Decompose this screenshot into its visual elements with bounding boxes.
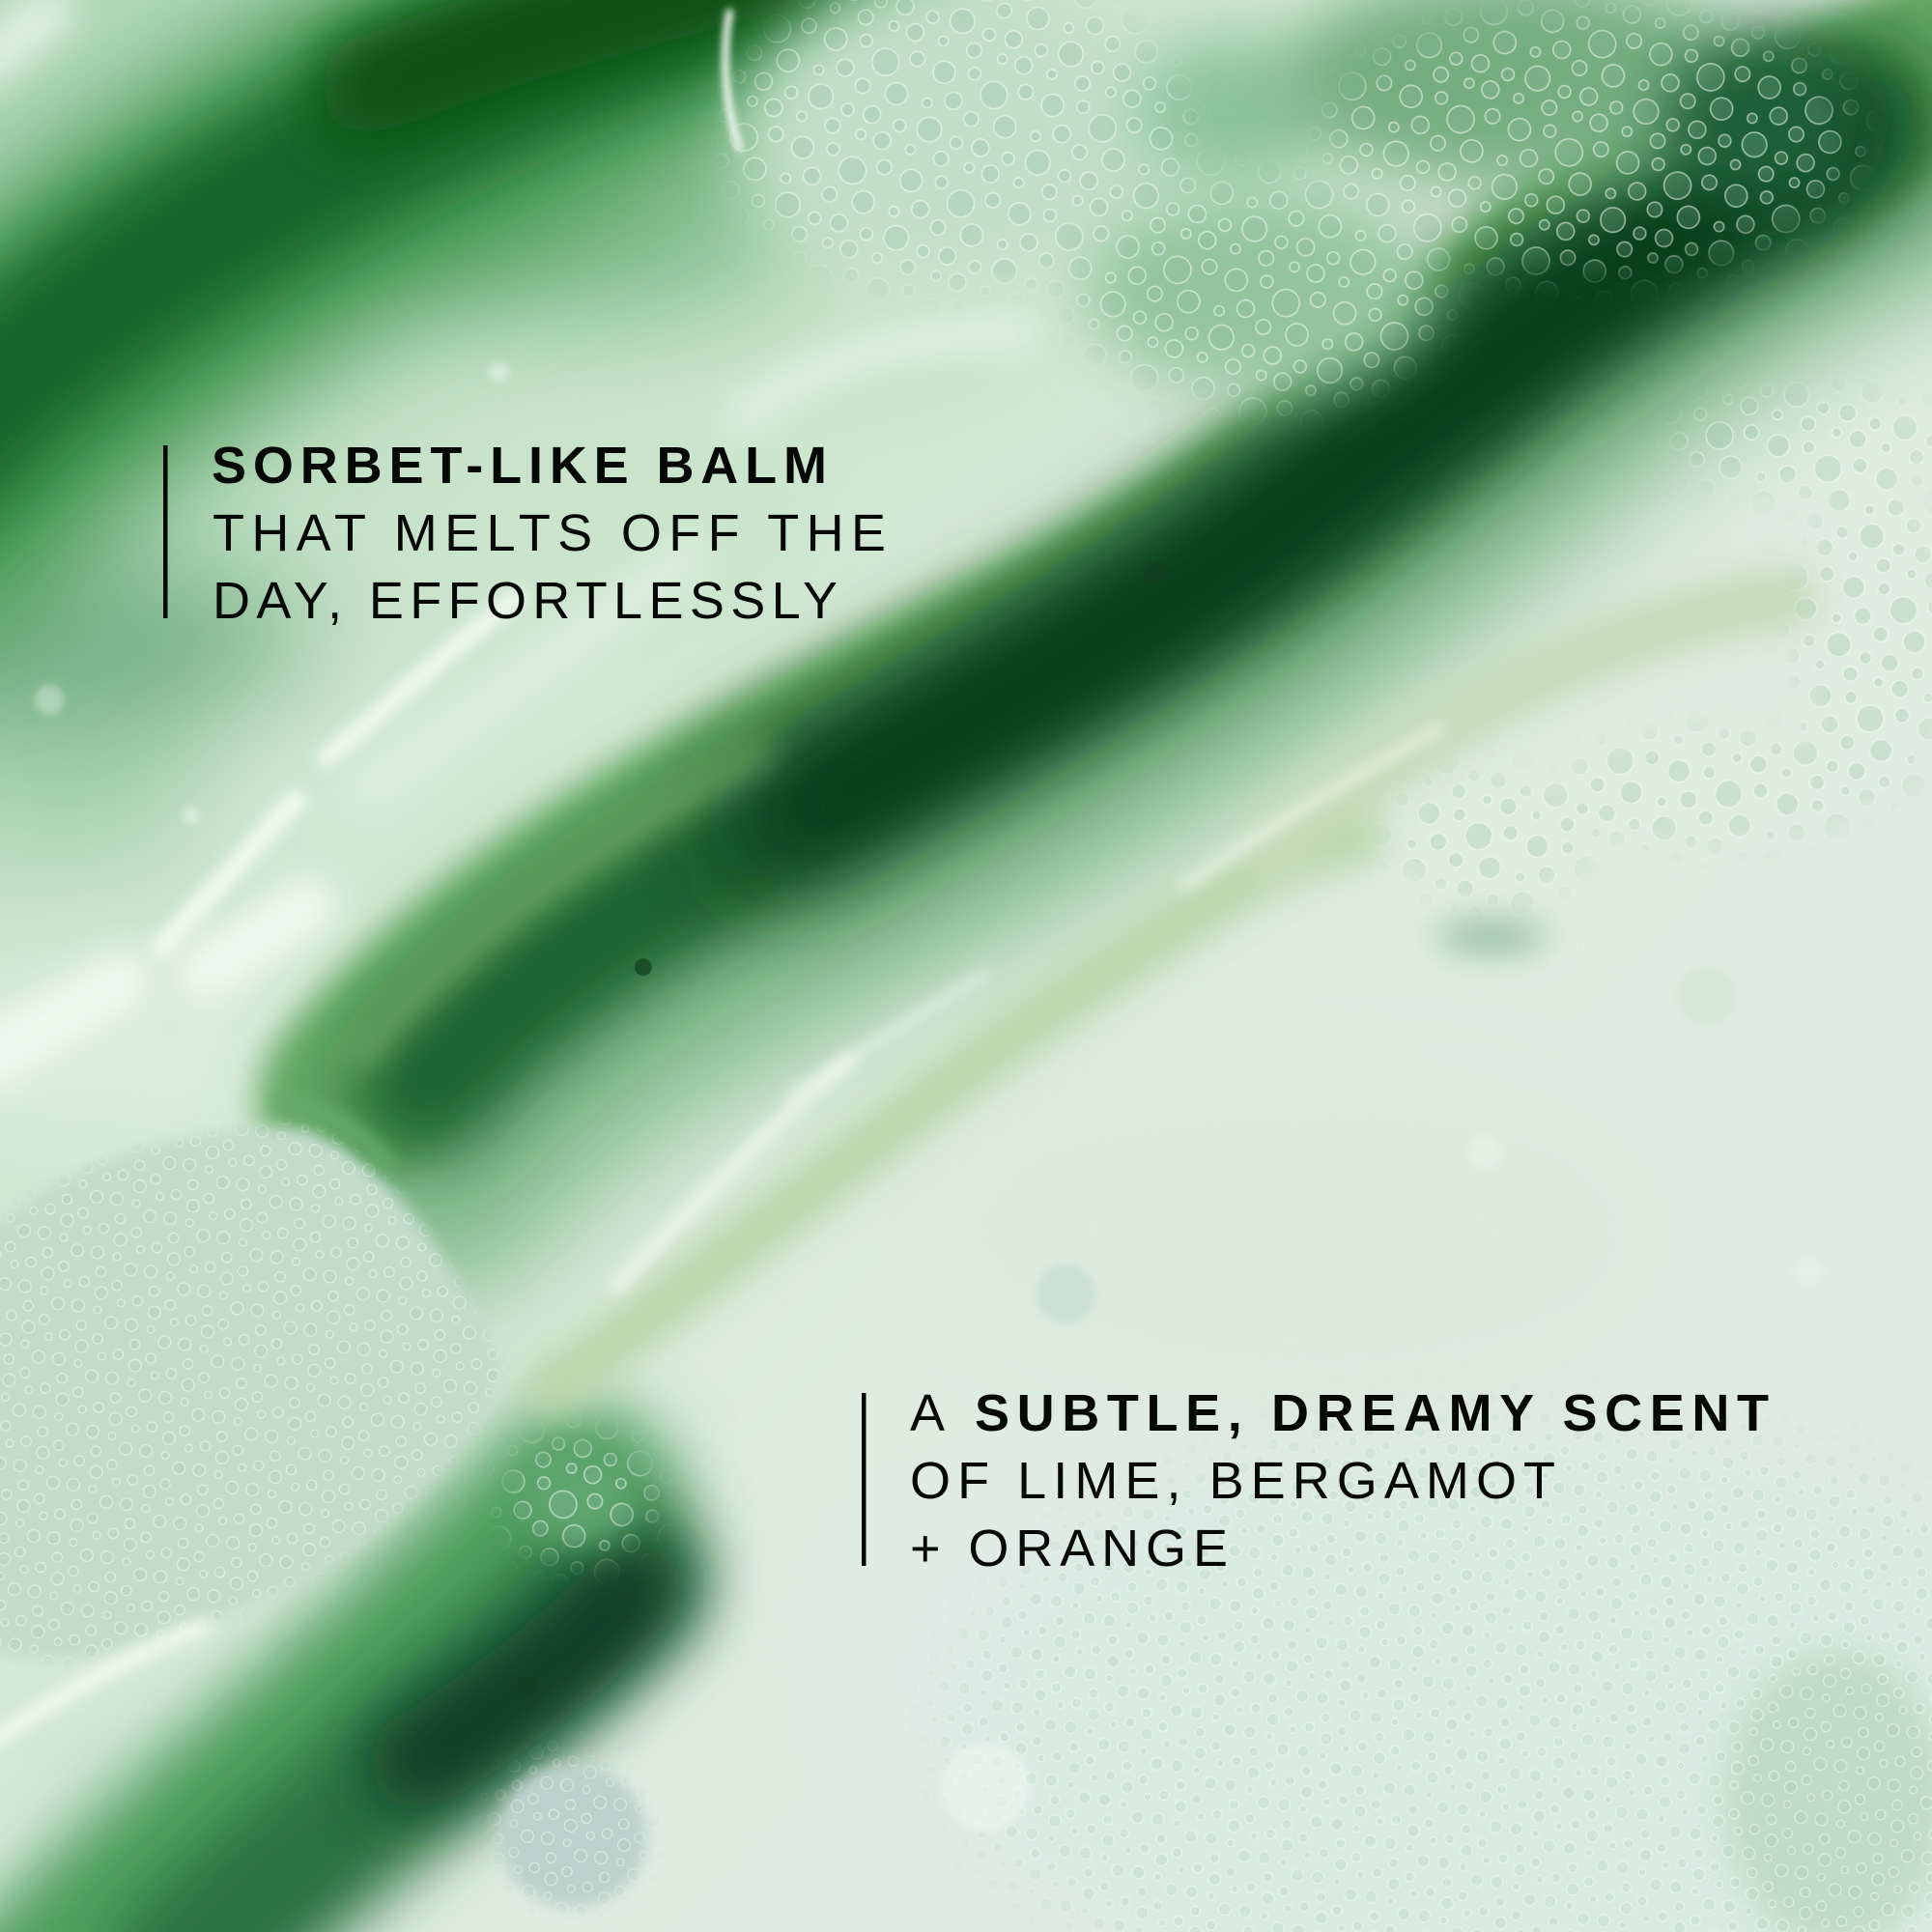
- band: central dark green diagonal: [352, 49, 1932, 1182]
- callout text: OF LIME, BERGAMOT: [910, 1452, 1555, 1510]
- glossy highlights: [0, 13, 1441, 1744]
- callout rule: [163, 445, 168, 618]
- callout rule: [862, 1393, 866, 1566]
- ridge: light edge above central band: [357, 752, 764, 1060]
- callout text: THAT MELTS OFF THE: [213, 504, 886, 562]
- dark bubble specks: [518, 562, 1167, 1695]
- callout: subtle scent: [862, 1384, 1769, 1577]
- callout text: DAY, EFFORTLESSLY: [213, 572, 838, 630]
- band: top-left dark green: [0, 0, 764, 480]
- olive ridges: [554, 598, 1786, 1386]
- callout text: [910, 1384, 1769, 1577]
- band: lower left dark green: [49, 1503, 635, 1932]
- callout text: SUBTLE, DREAMY SCENT: [975, 1384, 1769, 1442]
- callout text: [212, 437, 886, 630]
- callout text: + ORANGE: [910, 1520, 1228, 1577]
- callout: sorbet-like balm: [163, 437, 886, 630]
- callout text: A: [910, 1384, 945, 1442]
- callout text: SORBET-LIKE BALM: [212, 437, 827, 495]
- scattered droplets: [35, 362, 1824, 1831]
